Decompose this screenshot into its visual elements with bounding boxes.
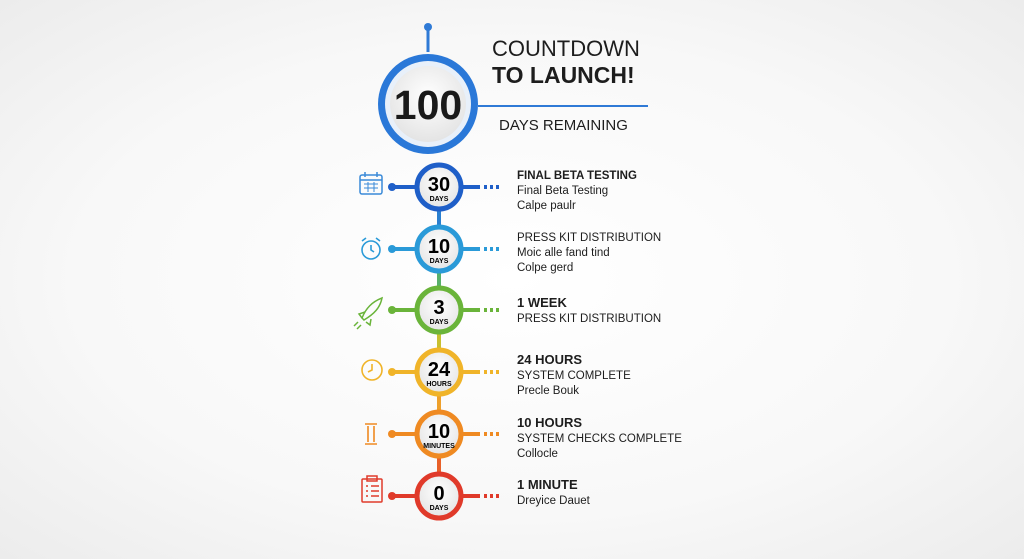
text: press kit distribution: Moic alle fand tind <box>517 247 610 259</box>
subtitle: days remaining: DAYS REMAINING <box>499 117 628 134</box>
milestone: 3 days: DAYS <box>430 319 449 326</box>
text: 10 hours <box>517 415 682 460</box>
milestone: 30 days: DAYS <box>430 196 449 203</box>
text: 10 hours: 10 HOURS <box>517 415 582 430</box>
text: press kit distribution: Colpe gerd <box>517 262 573 274</box>
text: 24 hours: 24 HOURS <box>517 352 582 367</box>
milestone: 10 days: DAYS <box>430 258 449 265</box>
text: final beta testing: FINAL BETA TESTING <box>517 170 637 182</box>
icon: alarm clock <box>362 238 380 259</box>
text: 1 week <box>517 295 661 325</box>
milestone: 3 days: 3 <box>433 297 445 319</box>
text: 10 hours: SYSTEM CHECKS COMPLETE <box>517 433 682 445</box>
icon: hourglass <box>365 424 377 444</box>
milestone: 24 hours: HOURS <box>426 381 452 388</box>
text: 24 hours: Precle Bouk <box>517 385 579 397</box>
milestone: 30 days: 30 <box>428 174 450 196</box>
text: 10 hours: Collocle <box>517 448 558 460</box>
text: 24 hours: SYSTEM COMPLETE <box>517 370 631 382</box>
text: final beta testing: Final Beta Testing <box>517 185 608 197</box>
hero: 100 days circle <box>378 23 648 154</box>
milestone: 24 hours <box>388 350 500 394</box>
text: press kit distribution: PRESS KIT DISTRIBUTION <box>517 232 661 244</box>
text: 1 week: 1 WEEK <box>517 295 567 310</box>
text: 24 hours <box>517 352 631 397</box>
text: 1 minute: Dreyice Dauet <box>517 495 590 507</box>
title: COUNTDOWN <box>492 36 640 61</box>
vertical connectors <box>437 209 441 474</box>
icon: calendar <box>360 172 382 194</box>
text: final beta testing: Calpe paulr <box>517 200 576 212</box>
milestone: 0 days: DAYS <box>430 505 449 512</box>
hero: 100 days circle: 100 <box>394 82 462 128</box>
title: TO LAUNCH! <box>492 62 635 88</box>
milestone: 10 days: 10 <box>428 236 450 258</box>
milestone: 10 days <box>388 227 500 271</box>
text: press kit distribution <box>517 232 661 274</box>
milestone: 10 minutes <box>388 412 500 456</box>
text: 1 week: PRESS KIT DISTRIBUTION <box>517 313 661 325</box>
milestone: 0 days <box>388 474 500 518</box>
text: final beta testing <box>517 170 637 212</box>
milestone: 10 minutes: 10 <box>428 421 450 443</box>
milestone: 3 days <box>388 288 500 332</box>
milestone: 0 days: 0 <box>433 483 445 505</box>
text: 1 minute: 1 MINUTE <box>517 477 578 492</box>
milestone: 24 hours: 24 <box>428 359 451 381</box>
milestone: 30 days <box>388 165 500 209</box>
icon: clipboard <box>362 476 382 502</box>
milestone: 10 minutes: MINUTES <box>423 443 455 450</box>
text: 1 minute <box>517 477 590 507</box>
icon: clock <box>362 360 382 380</box>
title <box>492 36 640 88</box>
icon: rocket <box>354 298 382 329</box>
